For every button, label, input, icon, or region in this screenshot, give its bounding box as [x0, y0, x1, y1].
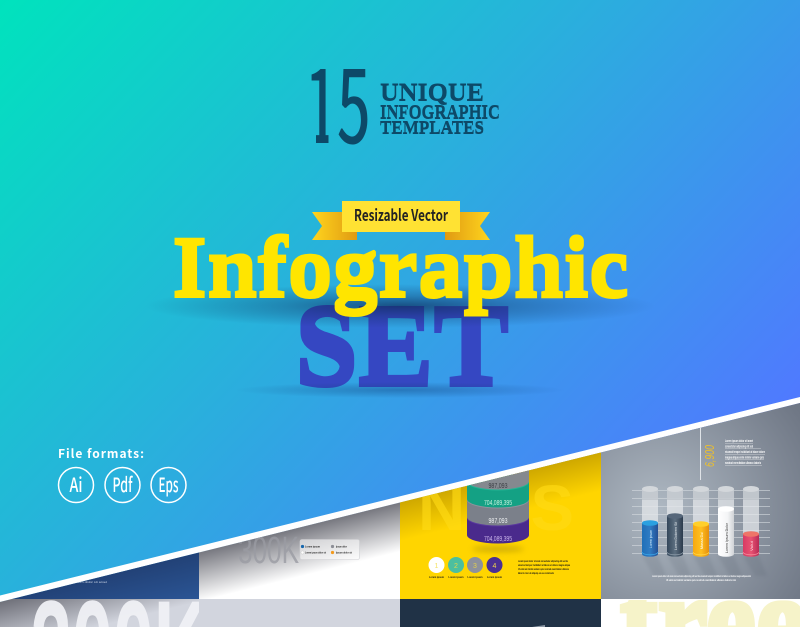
numbered circles: Lorem ipsum: [448, 575, 464, 579]
format badge: Ai: Ai: [70, 469, 82, 498]
legend box: Ipsum dolor sit: [336, 550, 352, 554]
numbered circles: [428, 557, 503, 579]
grid lines: [632, 490, 770, 554]
300K number: 300K: [238, 530, 299, 572]
diagonal shadow: [0, 599, 199, 627]
format badge: Eps: Eps: [158, 469, 178, 498]
banner box: [342, 201, 460, 232]
title word: Infographic: Infographic: [172, 219, 629, 315]
panel: lower left 300K template: [0, 599, 199, 627]
number 15: [303, 22, 370, 173]
diagonal shadow: [199, 502, 400, 598]
shadow under Infographic: [145, 284, 655, 328]
bar: white: Lorem Ipsum Dolor: [724, 522, 729, 553]
panel: lower white template with tree text: [601, 599, 800, 627]
ribbon right tail: [445, 212, 490, 240]
format badge: Pdf: Pdf: [112, 469, 133, 498]
shadow under SET: [235, 382, 565, 398]
pale background letters: NIKS: [418, 472, 574, 544]
bar: red: Vulut: [749, 540, 754, 551]
layer teal: 704,089,395: [484, 500, 512, 507]
layer gray lower: 987,093: [488, 518, 508, 525]
legend box: Ipsum dolor: [336, 544, 348, 548]
small pale mark: [532, 625, 545, 627]
stacked cylinder chart: [467, 470, 529, 544]
heading lines: TEMPLATES: [380, 118, 484, 138]
text block: nostrud exercitation ullamco laboris: [725, 461, 761, 465]
navy panel small text: Lorem ipsum dolor sit amet: [62, 581, 107, 584]
paragraph: Ut enim ad minim veniam quis nostrud exercitation ullamco: [518, 567, 569, 571]
top shade: [400, 452, 601, 534]
panel: lower dark template: [400, 599, 601, 627]
cylinder bar chart: [632, 486, 770, 557]
legend box: Lorem ipsum dolor sit: [305, 550, 326, 554]
file formats: [58, 445, 186, 502]
title word: SET: SET: [295, 282, 509, 409]
numbered circles: 4: [493, 563, 497, 570]
caption: [652, 575, 751, 582]
numbered circles: 1: [435, 563, 439, 570]
yellow number 6,900: 6,900: [702, 444, 717, 467]
legend box: [300, 540, 360, 560]
panel: gray cylinder template: [601, 395, 800, 599]
paragraph: laboris nisi ut aliquip ex ea commodo: [518, 571, 554, 575]
paragraph: [518, 559, 570, 575]
panel: navy template: [12, 552, 199, 599]
ribbon banner: [312, 201, 490, 240]
number 15: 15: [305, 22, 370, 173]
text block: magna aliqua enim minim veniam quis: [725, 456, 764, 460]
legend box: Lorem ipsum: [305, 544, 320, 548]
paragraph: Lorem ipsum dolor sit amet consectetur adipiscing elit sed do: [518, 559, 568, 563]
text block: eiusmod tempor incididunt ut labore dolore: [725, 450, 765, 454]
bar: dark: Lorem Dolorem Sit: [673, 521, 678, 550]
heading lines: UNIQUE: [380, 80, 484, 106]
numbered circles: 3: [473, 563, 477, 570]
heading: 15 unique infographic templates: [303, 22, 500, 173]
heading lines: [380, 80, 500, 138]
ribbon left tail: [312, 212, 357, 240]
glass tubes: [642, 490, 759, 534]
vertical divider: [700, 425, 701, 480]
numbered circles: Lorem ipsum: [468, 575, 483, 579]
text block: Lorem ipsum dolor sit amet: [725, 439, 754, 443]
bar: orange: Massa Dui: [699, 532, 704, 549]
text block: consectetur adipiscing elit sed: [725, 444, 753, 448]
layer gray upper: 987,093: [488, 483, 508, 490]
template previews: [0, 395, 800, 627]
layer purple: 704,089,395: [484, 536, 512, 543]
banner text: Resizable Vector: [354, 202, 448, 226]
caption: Ut enim ad minim veniam quis nostrud exercitation ullamco laboris nisi: [666, 578, 736, 582]
cylinder shadows: [645, 557, 757, 574]
bar: blue: Lorem ipsum: [648, 529, 653, 548]
paragraph: eiusmod tempor incididunt ut labore et dolore magna aliqua: [518, 563, 570, 567]
text block: [725, 439, 765, 465]
numbered circles: Lorem ipsum: [429, 575, 445, 579]
numbered circles: Lorem ipsum: [487, 575, 503, 579]
file formats label: File formats:: [58, 445, 144, 462]
panel: white template with 300K: [199, 502, 400, 599]
numbered circles: 2: [454, 563, 458, 570]
panel: yellow template: [400, 450, 601, 599]
panel: lower gray template: [199, 599, 400, 627]
stack shadow: [472, 546, 524, 552]
heading lines: INFOGRAPHIC: [380, 102, 500, 124]
white diagonal stripe: [0, 397, 800, 602]
